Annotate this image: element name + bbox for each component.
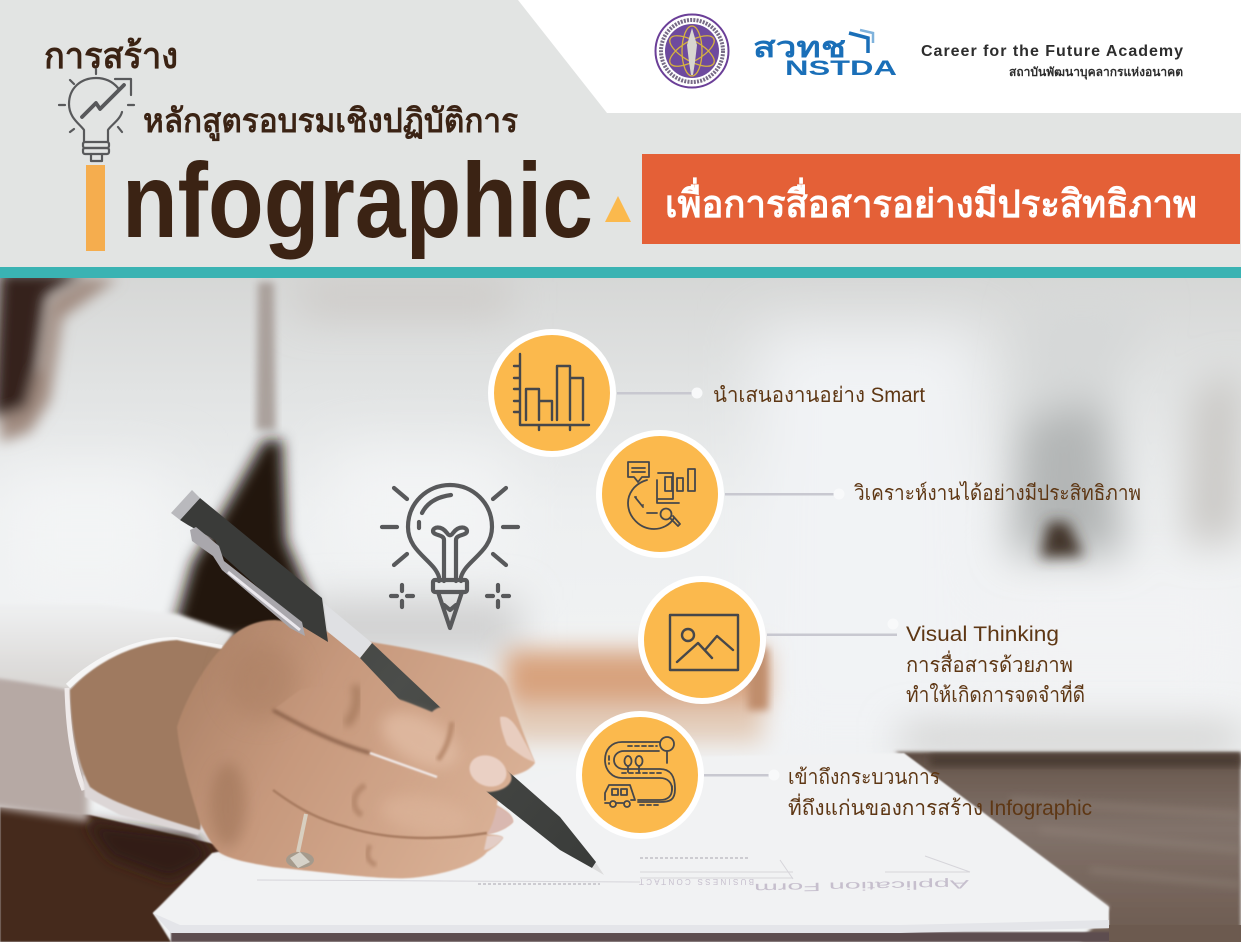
label 1: นำเสนองานอย่าง Smart	[713, 384, 925, 407]
academy name: สถาบันพัฒนาบุคลากรแห่งอนาคต	[1009, 65, 1183, 80]
shirt sleeve and cuff	[0, 605, 234, 835]
logo: NSTDA: สวทช	[753, 32, 846, 64]
circle badge 1	[491, 332, 613, 454]
connector line 3	[767, 618, 898, 636]
header background	[0, 0, 1241, 268]
circle badge 3	[641, 579, 763, 701]
circle badge 2	[599, 433, 721, 555]
item 4: process	[579, 714, 1092, 836]
finger creases	[273, 710, 370, 753]
orange triangle pointer	[605, 196, 631, 222]
academy name: Career for the Future Academy	[921, 43, 1183, 60]
icon: bar chart	[514, 354, 589, 430]
pen	[171, 490, 604, 875]
label 3: ทำให้เกิดการจดจำที่ดี	[906, 680, 1085, 707]
blurred skin of the other arm	[505, 650, 767, 742]
blurred dark spot between shirt folds	[1040, 522, 1084, 558]
orange banner: เพื่อการสื่อสารอย่างมีประสิทธิภาพ	[665, 177, 1197, 226]
icon: analytics pie and bars	[628, 462, 695, 529]
nail: top finger	[500, 717, 535, 762]
logo: NSTDA: NSTDA	[785, 57, 897, 80]
connector line 4	[704, 770, 780, 780]
label 4: ที่ถึงแก่นของการสร้าง Infographic	[788, 793, 1092, 820]
ring	[286, 814, 314, 868]
label 3: การสื่อสารด้วยภาพ	[906, 650, 1073, 677]
orange letter I of Infographic	[86, 165, 105, 251]
wooden table right	[895, 752, 1241, 942]
label 4	[788, 766, 1092, 820]
icon: winding road with bus	[605, 737, 675, 807]
thumb and fingers over pen	[273, 685, 513, 865]
circle badge 4	[579, 714, 701, 836]
big title word: nfographic: nfographic	[122, 142, 593, 260]
item 3: visual thinking	[641, 579, 1085, 707]
label 3: Visual Thinking	[906, 623, 1059, 646]
label 3	[906, 623, 1085, 707]
blurred dark gap behind the pen	[170, 440, 314, 640]
wrist	[70, 640, 226, 830]
item 2: analyze	[599, 433, 1141, 555]
logo: NSTDA	[753, 30, 897, 80]
label 2: วิเคราะห์งานได้อย่างมีประสิทธิภาพ	[854, 481, 1141, 505]
connector line 2	[725, 488, 844, 500]
icon: picture frame	[670, 615, 738, 670]
academy name	[921, 43, 1183, 80]
paper sheet	[153, 753, 1241, 942]
paper sheet: BUSINESS CONTACT	[639, 877, 754, 886]
icon: small light bulb with rising arrow	[59, 69, 134, 161]
teal divider bar	[0, 267, 1241, 278]
hand	[70, 620, 535, 878]
logo: university seal	[656, 14, 728, 88]
wooden table left	[0, 807, 240, 942]
label 4: เข้าถึงกระบวนการ	[788, 766, 940, 789]
hand body and fingers	[177, 620, 535, 878]
white logo area	[518, 0, 1241, 113]
photo: hand writing with a pen on paper	[0, 272, 1241, 942]
connector line 1	[617, 388, 702, 398]
title line: การสร้าง: การสร้าง	[44, 35, 178, 76]
orange banner	[642, 154, 1240, 244]
shading on back of hand	[244, 660, 291, 711]
item 1: present smart	[491, 332, 925, 454]
title line: หลักสูตรอบรมเชิงปฏิบัติการ: หลักสูตรอบรมเชิงปฏิบัติการ	[143, 102, 518, 142]
icon: light bulb with pencil tip	[382, 485, 518, 628]
paper sheet: Application Form	[754, 877, 969, 895]
